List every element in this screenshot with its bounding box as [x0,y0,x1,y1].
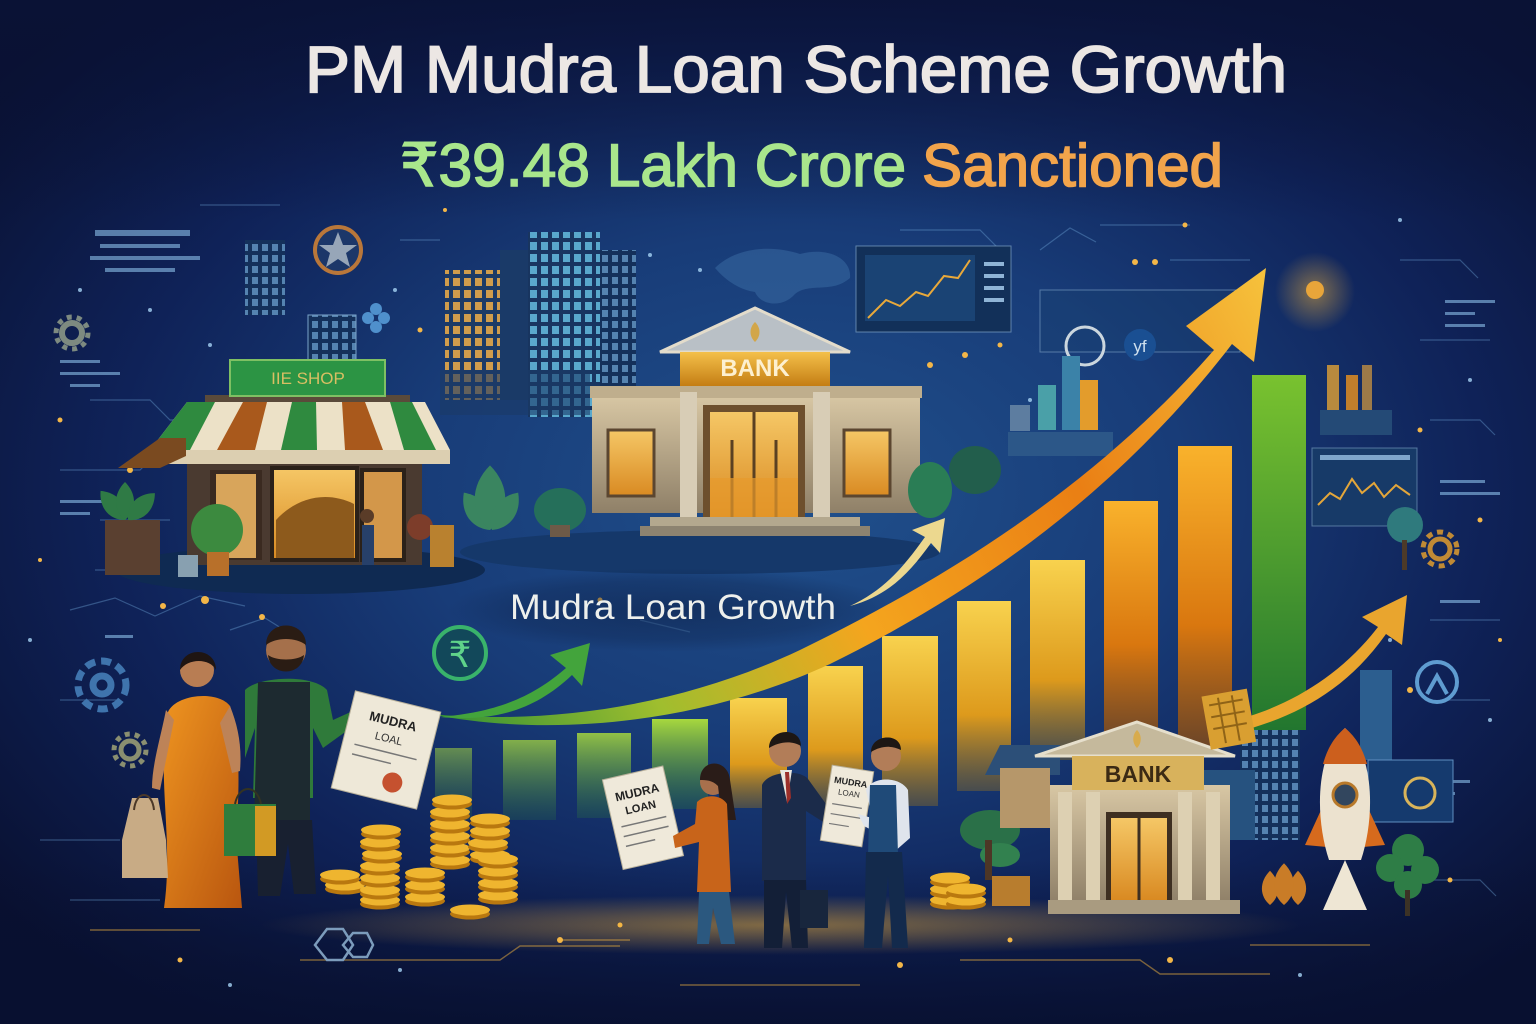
label: Mudra Loan Growth: Mudra Loan Growth [510,588,836,627]
title: PM Mudra Loan Scheme Growth [305,32,1287,106]
icon: gear right [1423,532,1457,566]
icon: settings ring left [78,661,126,709]
loan document left [331,691,441,809]
label: Mudra Loan Growth [447,568,897,652]
icon: gear left [56,317,88,349]
briefcase [800,890,828,928]
banker in vest [858,737,910,948]
bank right [985,722,1240,914]
bank centre [455,308,1001,574]
shop sign [230,360,385,396]
loan document centre [602,766,684,870]
bank right pediment: BANK [1105,761,1172,787]
bank right pediment [1035,722,1235,790]
shopkeeper man [224,626,359,896]
icon: person ring right [1417,662,1457,702]
subtitle: sanctioned amount: ₹39.48 Lakh Crore [400,132,906,199]
awning [118,402,450,468]
tech panel [1040,290,1240,365]
icon: right column bars [1320,365,1392,435]
tech panel: yf [1133,337,1147,356]
bank pediment [660,308,850,386]
buildings: centre skyline [440,232,636,417]
subtitle: sanctioned amount: Sanctioned [922,132,1223,199]
icon: rupee circle: ₹ [449,634,471,675]
icon: tree right [1387,507,1423,570]
factory machinery [1008,356,1113,456]
buildings: left skyline [245,240,356,360]
main growth arrow [430,268,1266,725]
bar chart [435,375,1306,820]
businessman in suit [762,732,834,948]
glow lamp [1275,252,1355,332]
loan document centre: MUDRA [614,781,661,804]
loan document centre: LOAN [624,799,657,817]
small arrow: right orange [1250,595,1407,728]
shop plants [94,482,454,577]
bonsai tree [960,810,1030,906]
coin stack right [930,872,986,910]
loan document handshake: LOAN [837,788,861,800]
icon: gear lower left [114,734,146,766]
gold coin stacks [320,794,518,920]
icon: star badge [315,227,361,273]
loan document left: MUDRA [368,708,419,735]
small arrow: green [440,643,590,718]
small plants right [1262,834,1439,916]
icon: hexagon cluster [315,929,373,960]
woman applicant [673,764,736,944]
bank columns [680,392,830,520]
bank plants [455,446,1001,537]
city right lower [1195,670,1453,840]
shop sign: IIE SHOP [271,369,345,388]
small arrow: cream [850,518,945,606]
world map shape [715,249,850,304]
bank pediment: BANK [720,355,790,382]
bank right door [1106,812,1172,900]
icon: rupee circle [434,627,486,679]
ground glow [260,895,1300,955]
background tech pattern [28,205,1502,987]
shop [94,360,485,594]
loan document handshake: MUDRA [833,775,869,790]
shop window [272,468,357,560]
green bag [224,789,276,856]
icon: flower cluster [362,303,390,333]
loan document left: LOAL [374,730,404,749]
chart panel right [1312,448,1417,526]
bank windows [608,430,890,496]
loan document handshake [820,765,874,847]
subtitle: sanctioned amount [400,132,1223,199]
dashboard line chart [856,246,1011,332]
rocket [1305,728,1385,910]
shopping bag [122,795,168,878]
bank entrance [703,405,805,517]
woman in orange sari [122,652,242,908]
gold blocks [1202,689,1256,750]
